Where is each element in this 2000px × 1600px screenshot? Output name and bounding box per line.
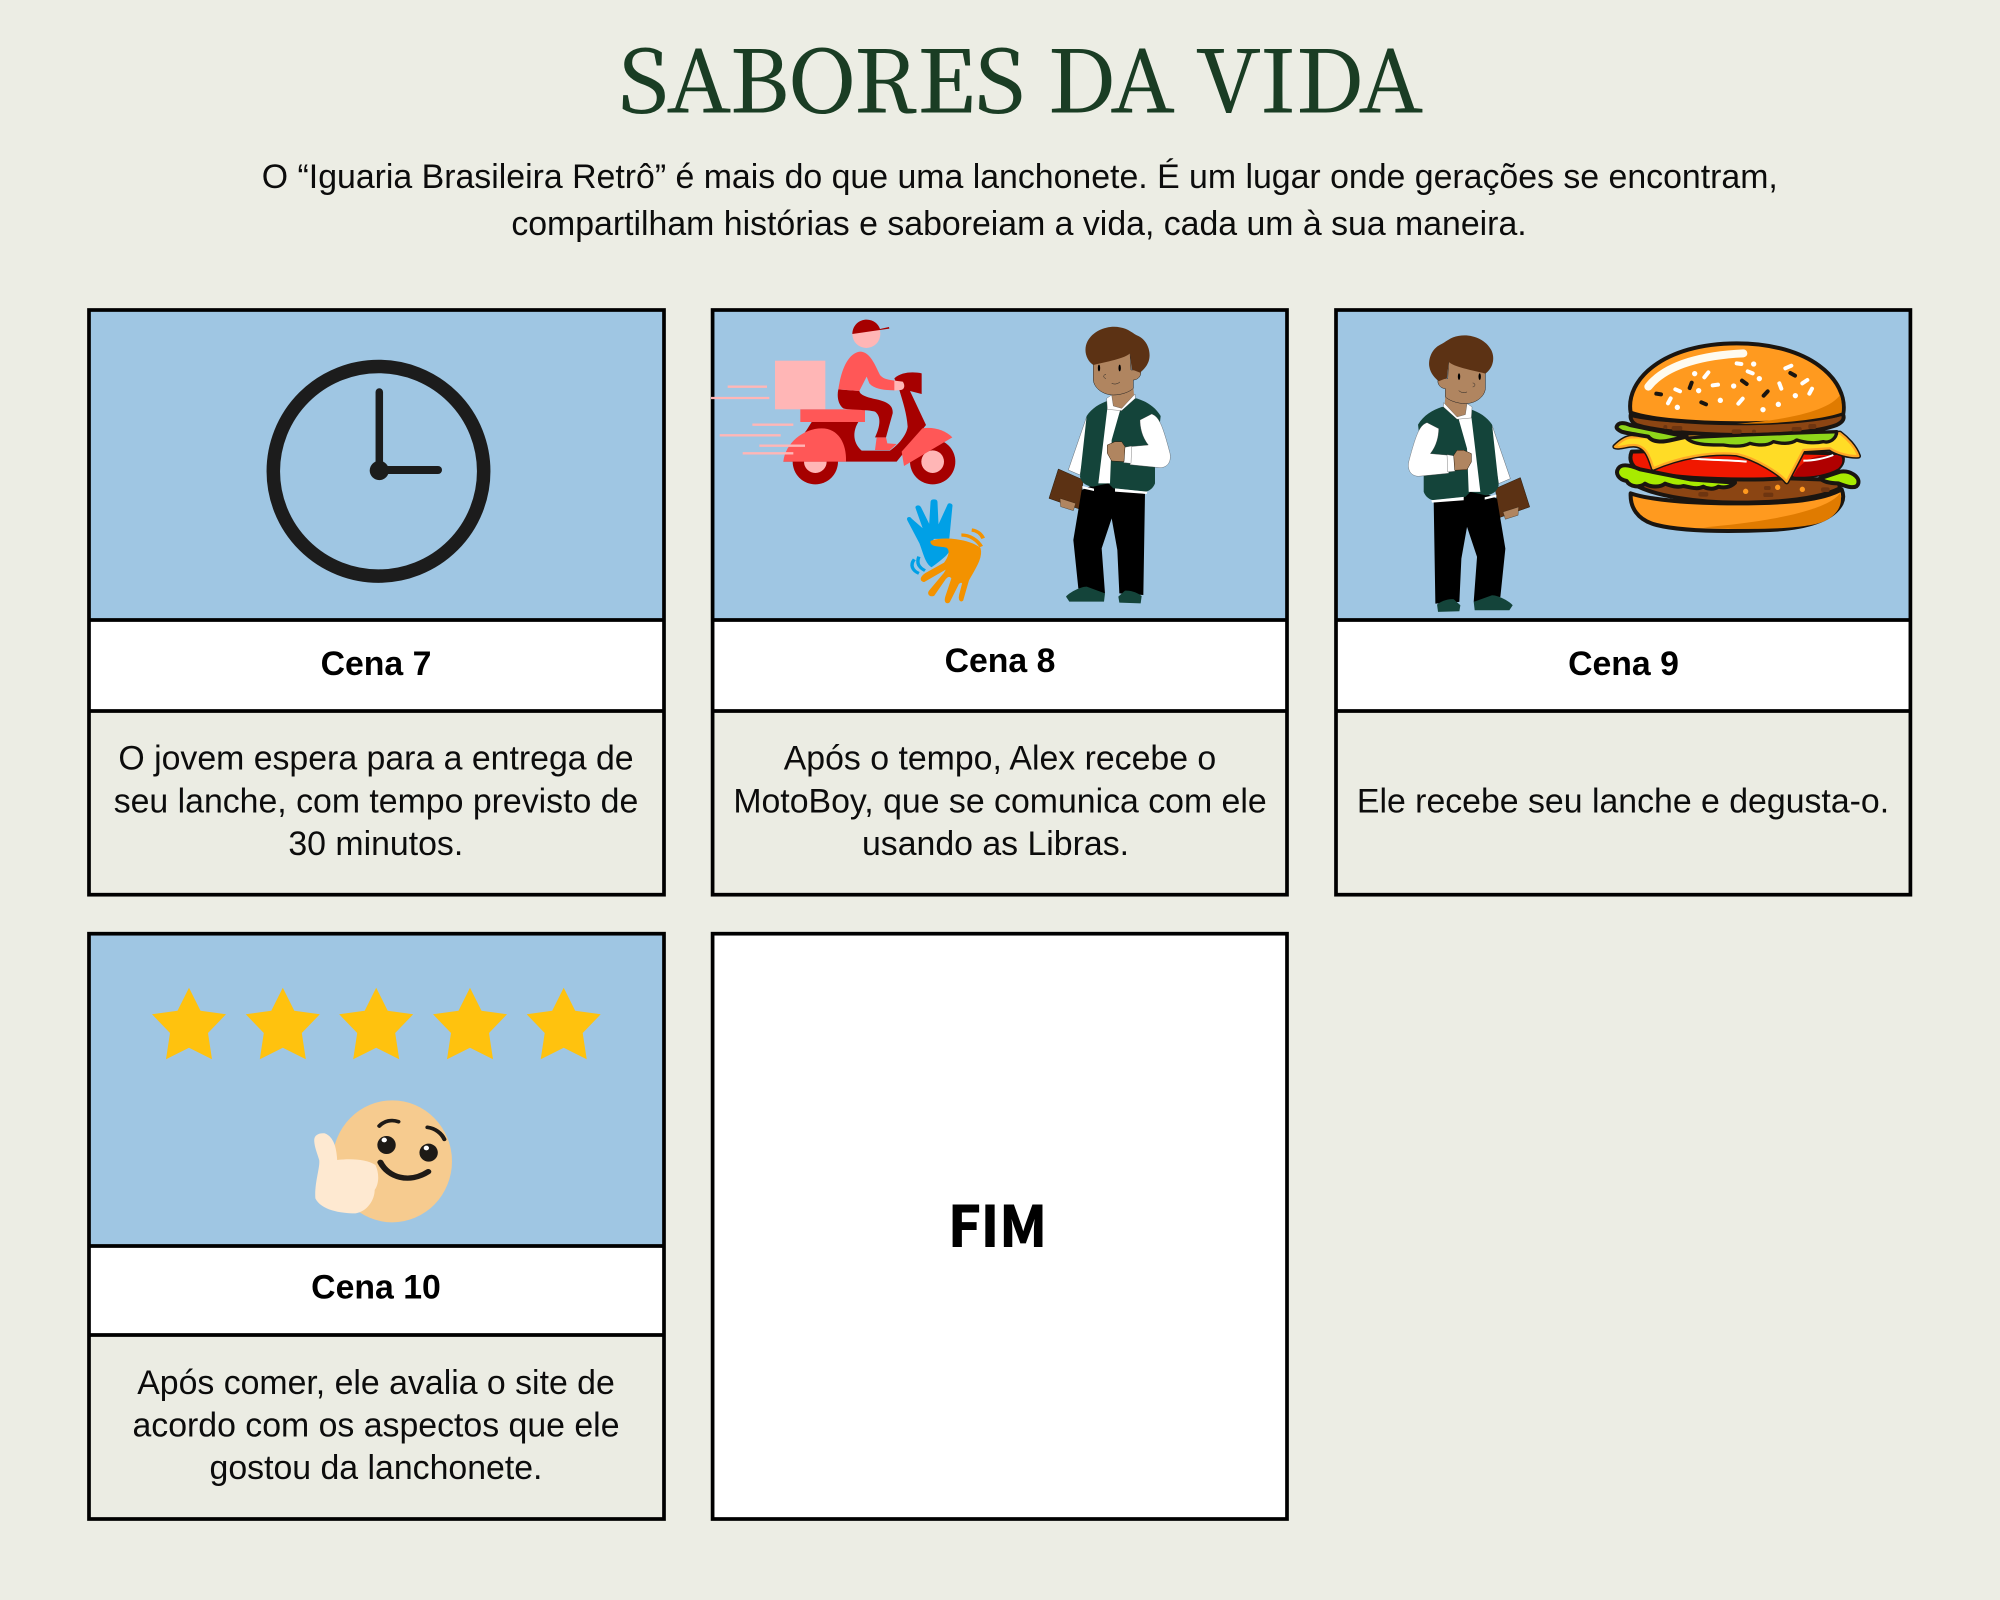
scene description: usando as Libras. [862,825,1129,863]
scene label: Cena 8: Cena 8 [945,642,1055,680]
intro text: compartilham histórias e saboreiam a vida, cada um à sua maneira. [511,205,1527,243]
scene description: Após comer, ele avalia o site de [137,1364,615,1402]
scene description [114,740,638,863]
scene label: Cena 9: Cena 9 [1568,645,1679,683]
scene description [132,1364,620,1487]
icon: clock [273,366,484,576]
panel: fim [713,934,1287,1519]
icon: smiling face with thumbs up [314,1100,452,1222]
panel: cena 8 [711,310,1287,895]
scene description: Ele recebe seu lanche e degusta-o. [1357,783,1889,821]
scene description: O jovem espera para a entrega de [118,740,634,778]
intro text [262,158,1778,243]
scene description: seu lanche, com tempo previsto de [114,783,638,821]
scene description: acordo com os aspectos que ele [132,1406,620,1444]
scene description: Após o tempo, Alex recebe o [784,740,1216,778]
scene label: Cena 10: Cena 10 [311,1269,441,1307]
icon: young man with jacket [1049,327,1170,603]
scene description: 30 minutos. [288,825,463,863]
icon: hamburger [1615,343,1859,531]
intro text: O “Iguaria Brasileira Retrô” é mais do que uma lanchonete. É um lugar onde gerações se encontram, [262,158,1778,196]
text: FIM: FIM [948,1183,1047,1264]
title: SABORES DA VIDA [618,13,1423,137]
panel: cena 10 [89,934,664,1519]
scene description [733,740,1267,863]
scene description: gostou da lanchonete. [210,1449,542,1487]
icon: young man with jacket, mirrored [1408,335,1530,612]
icon: five stars rating [152,988,601,1059]
scene label: Cena 7: Cena 7 [321,645,431,683]
icon: sign language hands [908,500,983,602]
scene description: MotoBoy, que se comunica com ele [733,783,1267,821]
panel: cena 9 [1336,310,1910,895]
panel: cena 7 [89,310,664,895]
icon: delivery scooter [711,320,955,484]
